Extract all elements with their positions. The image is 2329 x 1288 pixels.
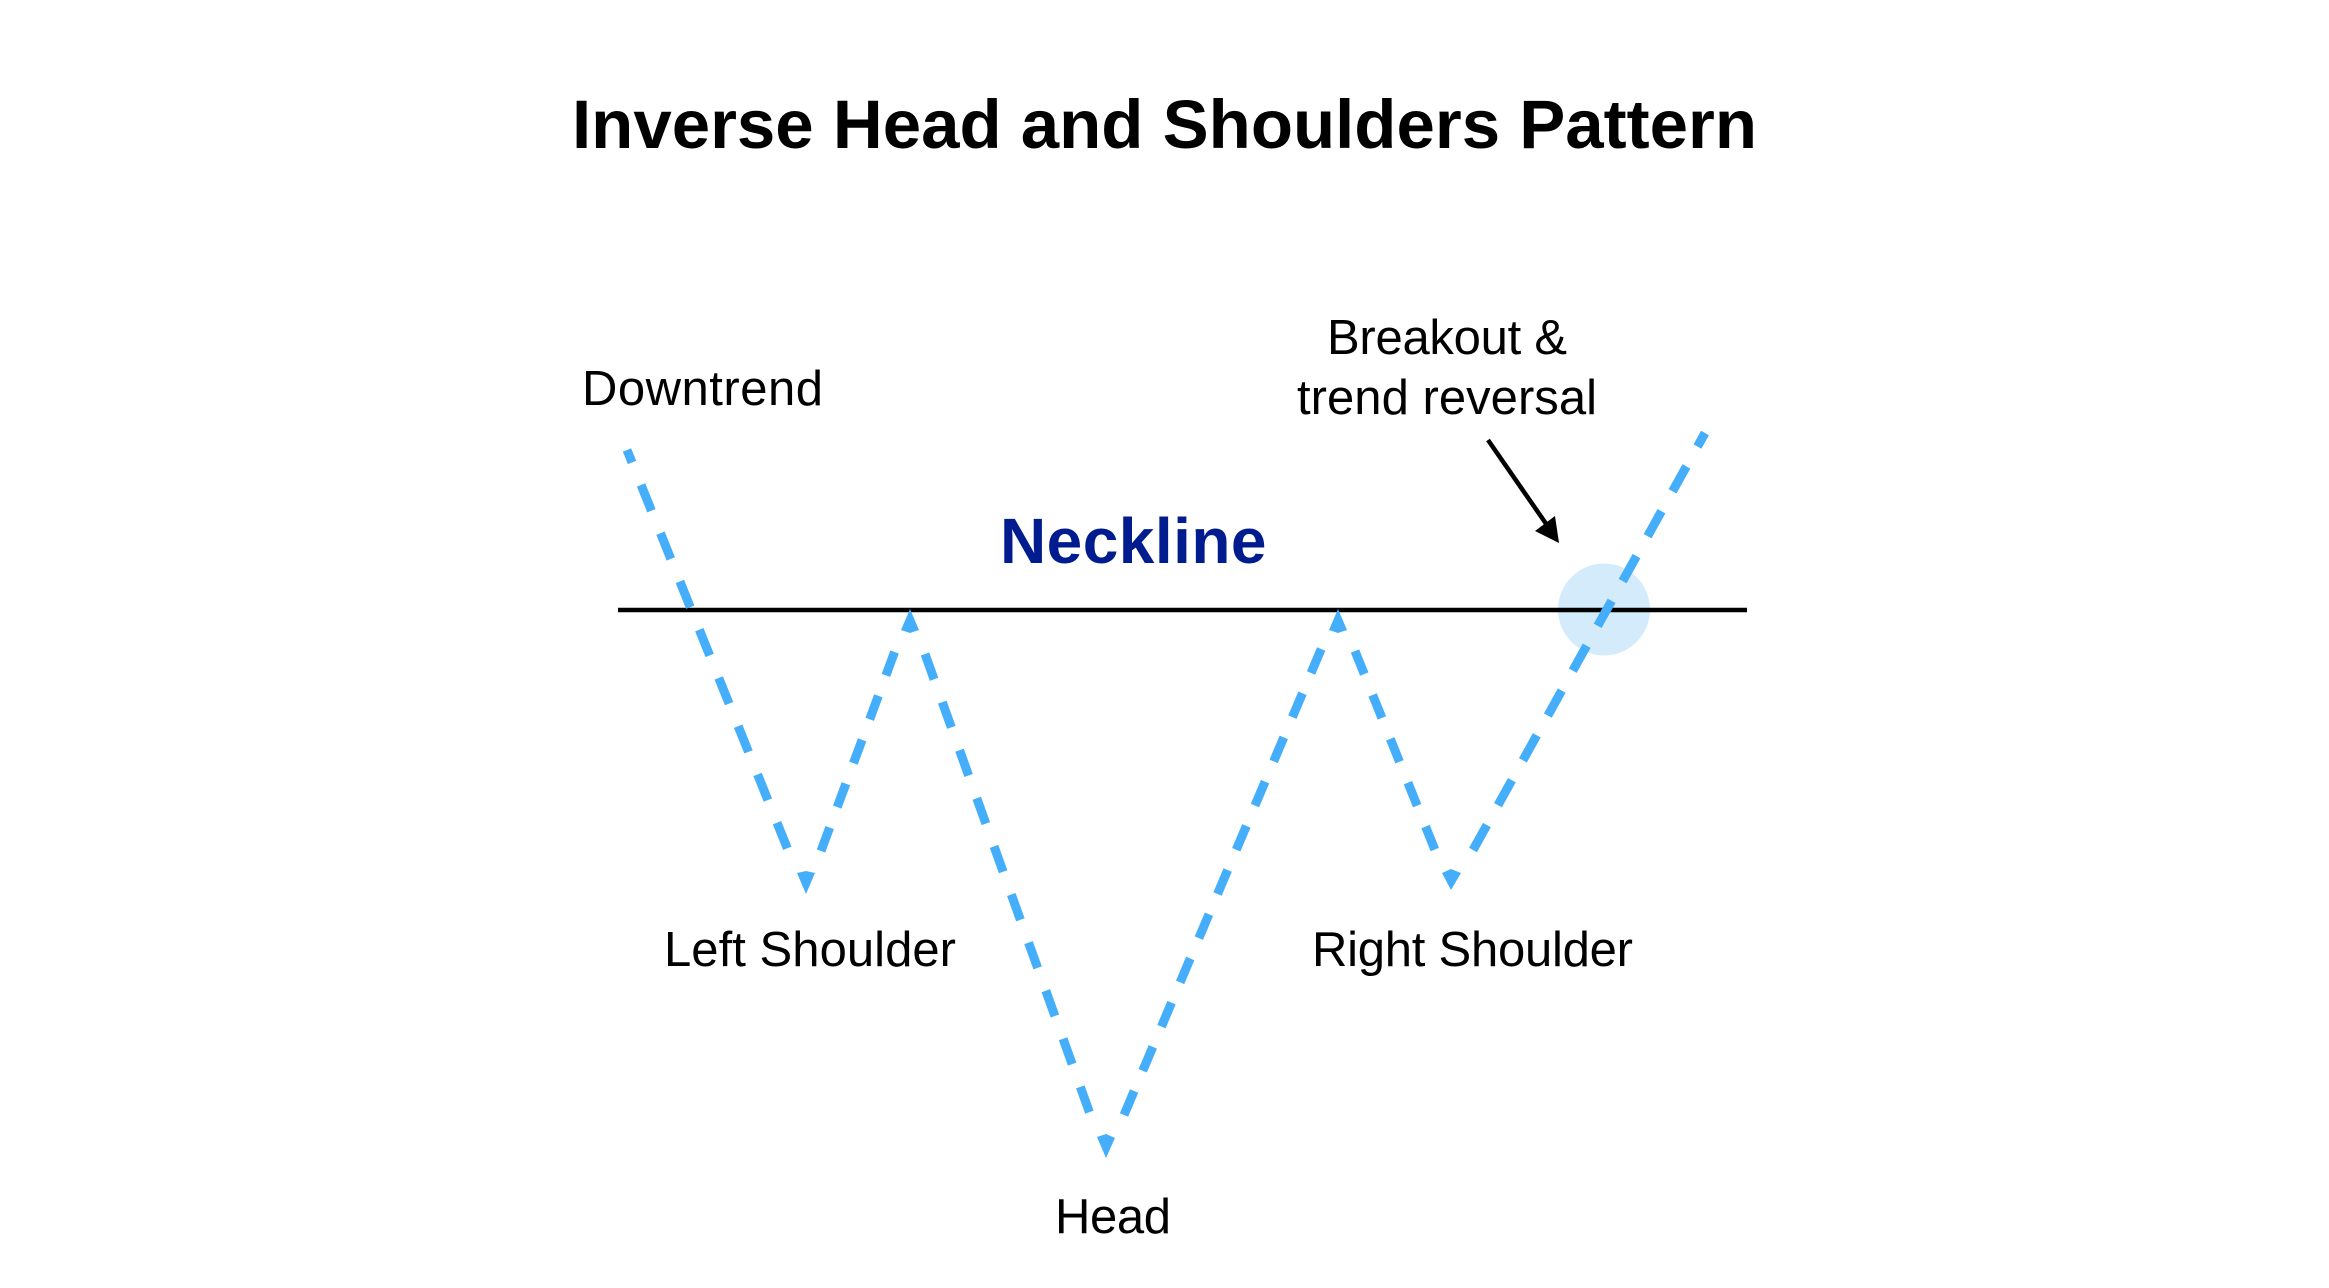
title: Inverse Head and Shoulders Pattern bbox=[572, 86, 1757, 163]
segment: downtrend to left shoulder bbox=[627, 450, 815, 894]
breakout highlight circle bbox=[1558, 564, 1650, 656]
label: head: Head bbox=[1055, 1190, 1171, 1244]
arrow: to breakout bbox=[1488, 440, 1559, 543]
label: right shoulder: Right Shoulder bbox=[1312, 923, 1633, 977]
segment: second peak to right shoulder bbox=[1355, 651, 1461, 890]
dashed price path bbox=[627, 433, 1705, 1158]
label: left shoulder: Left Shoulder bbox=[664, 923, 956, 977]
neckline bbox=[618, 608, 1747, 612]
segment: right shoulder to breakout bbox=[1473, 433, 1705, 850]
label: breakout and trend reversal bbox=[1297, 311, 1597, 425]
label: downtrend: Downtrend bbox=[582, 362, 823, 416]
segment: head to second peak bbox=[1124, 609, 1347, 1115]
label: breakout and trend reversal: trend reversal bbox=[1297, 371, 1597, 425]
label: breakout and trend reversal: Breakout & bbox=[1327, 311, 1567, 365]
segment: first peak to head bbox=[925, 654, 1115, 1158]
neckline label: Neckline bbox=[1000, 505, 1266, 577]
segment: left shoulder to first peak bbox=[821, 609, 919, 851]
